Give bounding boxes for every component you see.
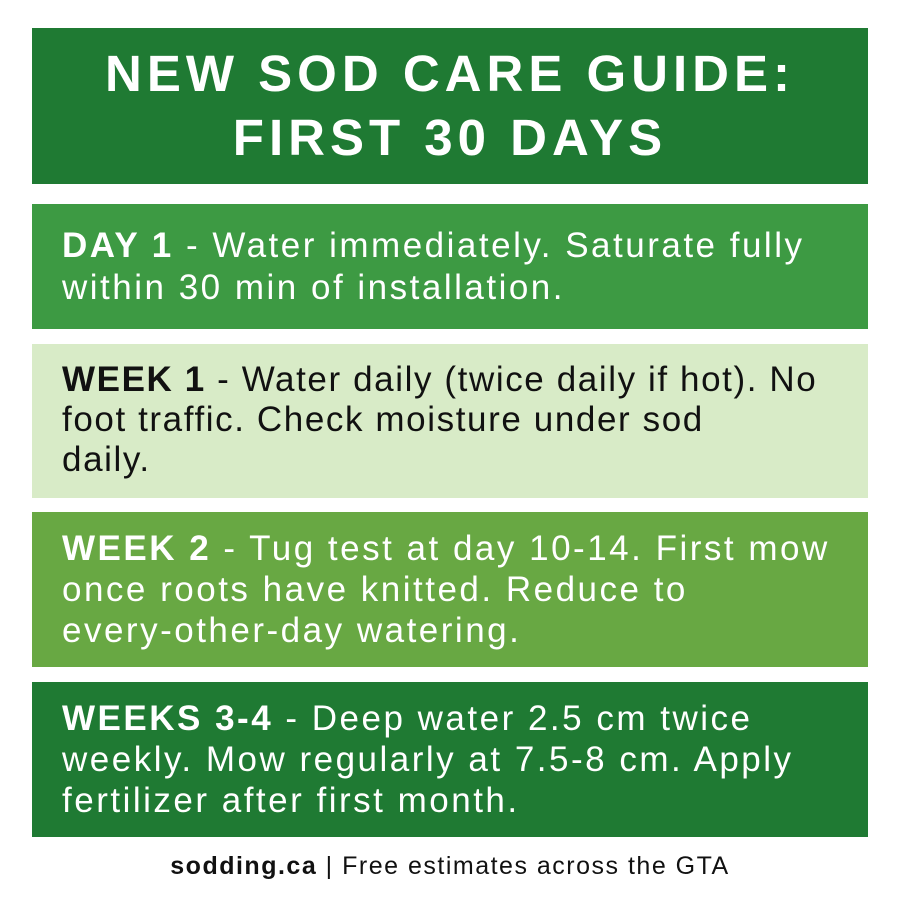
- panel: day 1: within 30 min of installation.: [62, 268, 565, 307]
- panel: week 1: [32, 344, 868, 498]
- title: NEW SOD CARE GUIDE:: [105, 45, 795, 102]
- panel: week 1: WEEK 1 - Water daily (twice daily if hot). No: [62, 360, 817, 399]
- panel: week 2: [32, 512, 868, 667]
- panel: day 1: DAY 1 - Water immediately. Saturate fully: [62, 226, 804, 265]
- panel: weeks 3-4: fertilizer after first month.: [62, 781, 520, 820]
- panel: weeks 3-4: weekly. Mow regularly at 7.5-8 cm. Apply: [62, 740, 794, 779]
- panel: day 1: [32, 204, 868, 329]
- panel: week 1: foot traffic. Check moisture under sod: [62, 400, 704, 439]
- title: [32, 28, 868, 184]
- panel: week 2: once roots have knitted. Reduce to: [62, 570, 688, 609]
- panel: week 2: WEEK 2 - Tug test at day 10-14. First mow: [62, 529, 830, 568]
- panel: weeks 3-4: WEEKS 3-4 - Deep water 2.5 cm twice: [62, 699, 752, 738]
- title: FIRST 30 DAYS: [233, 109, 667, 166]
- footer: sodding.ca | Free estimates across the GTA: [170, 852, 730, 880]
- panel: week 1: daily.: [62, 440, 151, 479]
- panel: week 2: every-other-day watering.: [62, 611, 521, 650]
- panel: weeks 3-4: [32, 682, 868, 837]
